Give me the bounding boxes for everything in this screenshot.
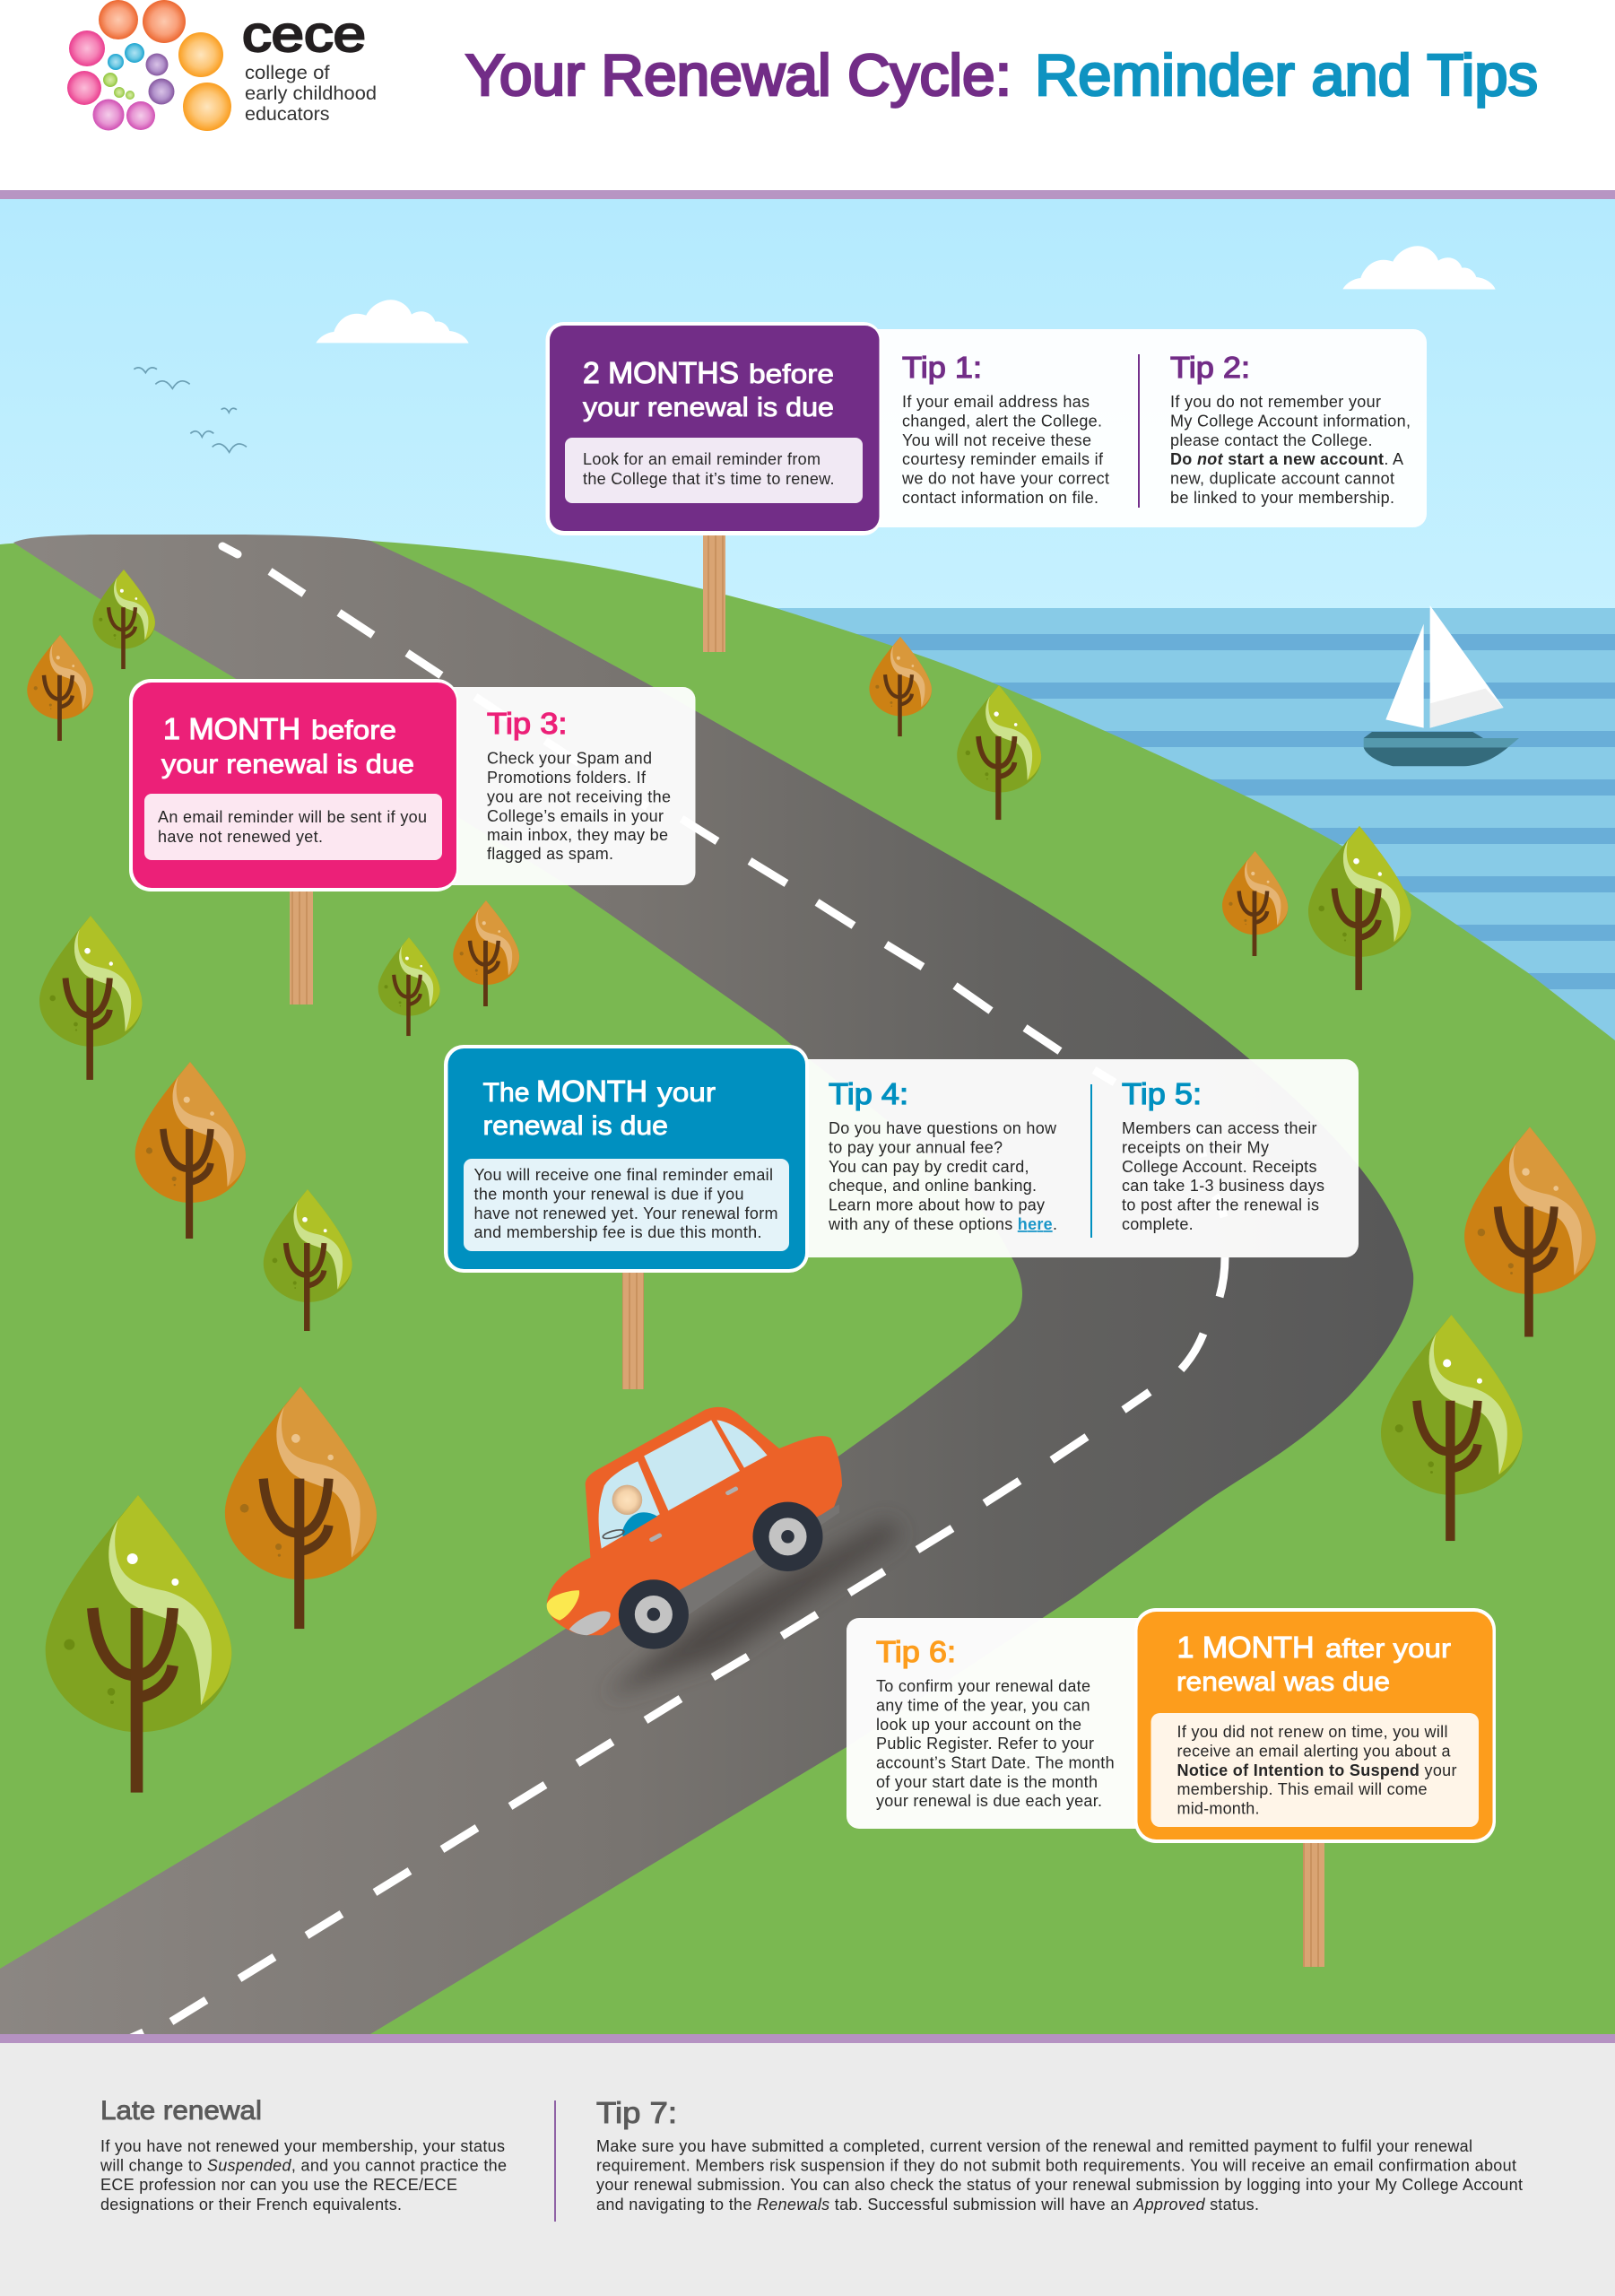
tip 2: If you do not remember your	[1170, 393, 1381, 411]
tip 2: be linked to your membership.	[1170, 489, 1394, 507]
tip 1: You will not receive these	[902, 431, 1091, 449]
tip 3 panel	[439, 687, 696, 885]
tip 5: Tip 5:	[1122, 1077, 1202, 1110]
footer panel	[0, 2043, 1615, 2296]
late renewal: ECE profession nor can you use the RECE/ECE	[100, 2176, 457, 2194]
sign board: An email reminder will be sent if you	[158, 808, 427, 826]
logo wordmark: college of	[245, 62, 330, 83]
sign board	[129, 679, 458, 891]
tree 8	[378, 937, 440, 1036]
birds	[134, 368, 247, 452]
logo wordmark: cece	[242, 5, 366, 62]
tip 1: courtesy reminder emails if	[902, 450, 1104, 468]
tip 5: can take 1-3 business days	[1122, 1177, 1324, 1195]
sign: 1 month before	[129, 679, 696, 1004]
tip 1: contact information on file.	[902, 489, 1098, 507]
tips panel 1 and 2	[852, 329, 1427, 527]
logo wordmark: early childhood	[245, 83, 377, 104]
tip 4: Do you have questions on how	[829, 1119, 1057, 1137]
tree 13	[1381, 1315, 1523, 1541]
tips panel 4 and 5	[789, 1059, 1359, 1257]
sign board	[1134, 1608, 1496, 1843]
tip 3 panel: Promotions folders. If	[487, 769, 647, 787]
sign: month due	[444, 1045, 1359, 1389]
logo wordmark	[242, 5, 377, 125]
sea	[753, 608, 1615, 1057]
tip 1: If your email address has	[902, 393, 1090, 411]
tip 1	[901, 351, 1109, 507]
tip 2: new, duplicate account cannot	[1170, 470, 1394, 488]
tip 3 panel: College’s emails in your	[487, 807, 664, 825]
sign board: your	[657, 1078, 716, 1108]
tip 6 panel: account’s Start Date. The month	[876, 1754, 1115, 1772]
sign board: The	[482, 1078, 529, 1108]
road centre dashes	[127, 546, 1225, 2039]
tip 3 panel: Check your Spam and	[487, 750, 652, 768]
late renewal: If you have not renewed your membership, your status	[100, 2137, 505, 2155]
tree 11	[264, 1189, 352, 1331]
cloud right	[1342, 246, 1496, 290]
tree 12	[1464, 1126, 1596, 1337]
tree 15	[46, 1495, 231, 1793]
tip 6 panel: look up your account on the	[876, 1716, 1081, 1734]
tree 5	[1222, 851, 1288, 956]
tip 3 panel: main inbox, they may be	[487, 826, 668, 844]
sign board: 1 MONTH	[163, 712, 300, 745]
car shadow	[605, 1520, 901, 1697]
sign post	[1303, 1841, 1324, 1967]
sign post	[703, 534, 725, 652]
green hill	[0, 536, 1615, 2038]
tip 6 panel: Public Register. Refer to your	[876, 1735, 1094, 1752]
sign board: have not renewed yet.	[158, 828, 323, 846]
tip 2: Tip 2:	[1170, 351, 1250, 384]
tip 5	[1122, 1077, 1324, 1233]
road	[0, 535, 1413, 2038]
sign post	[290, 890, 313, 1004]
cloud left	[316, 300, 469, 344]
tree 9	[453, 900, 519, 1006]
tip 3 panel: flagged as spam.	[487, 845, 613, 863]
tip 4: Tip 4:	[829, 1077, 908, 1110]
tip 5: receipts on their My	[1122, 1139, 1269, 1157]
tip 3 panel: Tip 3:	[487, 707, 567, 740]
logo	[67, 0, 377, 131]
tip 1: changed, alert the College.	[902, 413, 1102, 430]
sign board: MONTH	[536, 1074, 647, 1108]
trees	[27, 570, 1596, 1793]
tip 7: Tip 7:	[596, 2096, 677, 2129]
sign board	[545, 322, 881, 535]
sign board: the month your renewal is due if you	[473, 1186, 744, 1204]
tip 7	[596, 2096, 1523, 2213]
tree 3	[869, 637, 932, 736]
tip 4: You can pay by credit card,	[829, 1158, 1029, 1176]
tip 2: My College Account information,	[1170, 413, 1411, 430]
tree 6	[1308, 826, 1411, 990]
tip 2: please contact the College.	[1170, 431, 1372, 449]
sign board: have not renewed yet. Your renewal form	[473, 1205, 778, 1222]
top purple band	[0, 190, 1615, 199]
logo circles	[67, 0, 231, 131]
sign board: receive an email alerting you about a	[1177, 1742, 1451, 1760]
car	[547, 1407, 842, 1649]
sailboat	[1364, 605, 1519, 766]
tip 1: we do not have your correct	[901, 470, 1109, 488]
sign board: renewal is due	[482, 1111, 668, 1141]
sign board: the College that it’s time to renew.	[583, 470, 834, 488]
sign board: 2 MONTHS	[583, 356, 739, 389]
sign board: and membership fee is due this month.	[473, 1223, 762, 1241]
late renewal: designations or their French equivalents.	[100, 2196, 402, 2213]
sign board: membership. This email will come	[1177, 1780, 1428, 1798]
tree 14	[225, 1387, 377, 1629]
sign board: before	[749, 360, 834, 389]
tip 5: Members can access their	[1122, 1119, 1316, 1137]
tip 7: Make sure you have submitted a completed, current version of the renewal and remitted payment to fulfil your renewal	[596, 2137, 1472, 2155]
sign board: 1 MONTH	[1177, 1631, 1315, 1664]
sign board: renewal was due	[1177, 1667, 1390, 1697]
tree 4	[957, 685, 1041, 820]
sign board	[444, 1045, 809, 1273]
logo wordmark: educators	[245, 103, 330, 125]
title: Reminder and Tips	[1035, 42, 1538, 108]
tree 2	[27, 635, 93, 741]
tip 4: cheque, and online banking.	[829, 1177, 1037, 1195]
tip 7: your renewal submission. You can also check the status of your renewal submission by logging into your My College Account	[596, 2176, 1523, 2194]
tip 6 panel: any time of the year, you can	[876, 1697, 1090, 1715]
sign: 1 month after	[847, 1608, 1496, 1967]
tip 2	[1170, 351, 1411, 507]
tip 4: Learn more about how to pay	[829, 1196, 1045, 1214]
tip 5: College Account. Receipts	[1122, 1158, 1316, 1176]
header background	[0, 0, 1615, 190]
late renewal: will change to Suspended, and you cannot practice the	[100, 2156, 507, 2174]
sign board: before	[311, 716, 396, 745]
sign board: your renewal is due	[161, 750, 414, 779]
tip 6 panel: your renewal is due each year.	[876, 1792, 1102, 1810]
tree 1	[92, 570, 155, 669]
sign board: your renewal is due	[583, 393, 834, 422]
tip 3 panel: you are not receiving the	[487, 787, 671, 805]
sign board: If you did not renew on time, you will	[1177, 1723, 1447, 1741]
late renewal	[100, 2096, 507, 2213]
sign board: Notice of Intention to Suspend your	[1177, 1761, 1456, 1779]
tree 10	[135, 1062, 246, 1239]
tip 6 panel: Tip 6:	[876, 1635, 956, 1668]
tip 5: complete.	[1122, 1215, 1194, 1233]
tip 6 panel	[847, 1618, 1157, 1829]
tip 1: Tip 1:	[902, 351, 982, 384]
tip 2: Do not start a new account. A	[1170, 450, 1403, 468]
bottom purple band	[0, 2034, 1615, 2043]
tip 5: to post after the renewal is	[1122, 1196, 1319, 1214]
late renewal: Late renewal	[100, 2096, 262, 2126]
tip 6 panel: To confirm your renewal date	[876, 1677, 1090, 1695]
tip 7: and navigating to the Renewals tab. Successful submission will have an Approved status.	[596, 2196, 1259, 2213]
tip 6 panel: of your start date is the month	[876, 1773, 1098, 1791]
tip 4: to pay your annual fee?	[829, 1139, 1003, 1157]
title	[465, 42, 1538, 108]
sign board: You will receive one final reminder email	[473, 1166, 773, 1184]
sign post	[622, 1271, 644, 1389]
sign board: mid-month.	[1177, 1799, 1259, 1817]
sign board: Look for an email reminder from	[583, 450, 821, 468]
tip 4: with any of these options here.	[828, 1215, 1057, 1233]
tip 4	[828, 1077, 1057, 1233]
sign board: after your	[1325, 1634, 1451, 1664]
title: Your Renewal Cycle:	[465, 42, 1012, 108]
tree 7	[39, 916, 143, 1080]
sign: 2 months before	[545, 322, 1427, 652]
tip 7: requirement. Members risk suspension if they do not submit both requirements. You will receive an email confirmation about	[596, 2156, 1516, 2174]
